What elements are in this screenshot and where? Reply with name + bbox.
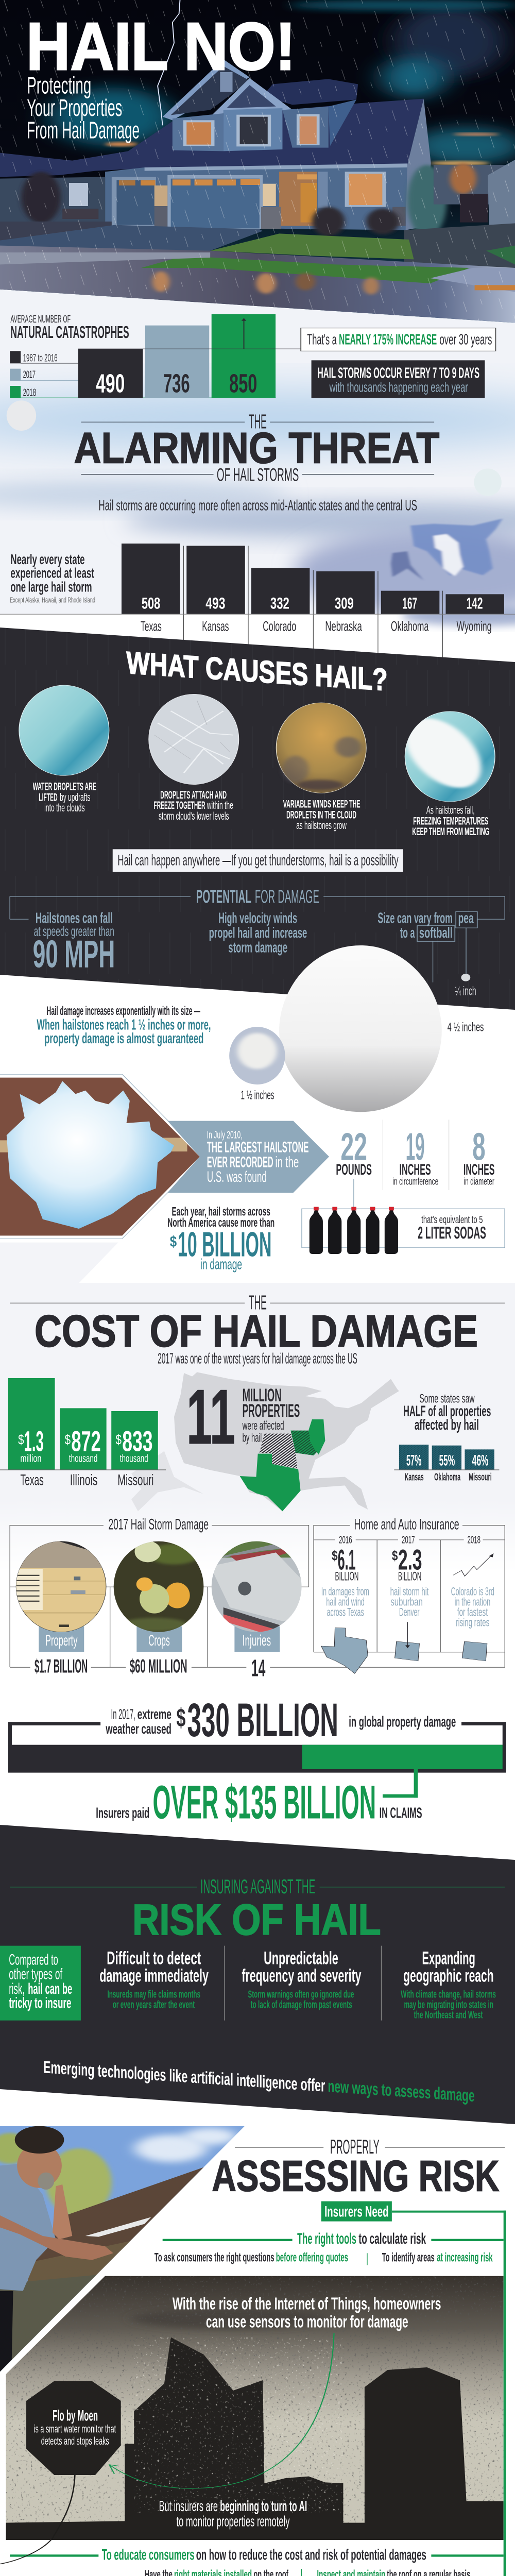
photo: injuries windshield: Injuries xyxy=(243,1632,271,1649)
panel: risk of hail content: hail can be xyxy=(28,1980,72,1997)
stat: 330 billion: $ xyxy=(176,1704,185,1733)
heading: the alarming threat xyxy=(7,400,502,514)
column: difficult to detect xyxy=(99,1948,209,2010)
bar chart: storms by state: 167 xyxy=(402,594,417,613)
heading: the alarming threat: OF HAIL STORMS xyxy=(217,465,299,485)
heading: risk of hail xyxy=(10,1875,505,1944)
legend: 2017 xyxy=(23,369,36,380)
photo: inspector on roof xyxy=(0,2126,250,2374)
stats: hailstone measurements xyxy=(336,1120,494,1209)
column: 2017: 2017 xyxy=(402,1534,415,1546)
chart: half of all properties xyxy=(394,1392,499,1483)
column: 2017 xyxy=(390,1534,428,1661)
step 1: water droplets: LIFTED xyxy=(39,791,58,804)
photo: crop damage xyxy=(114,1541,203,1677)
panel: hail storms by state: Nearly every state xyxy=(10,551,85,568)
panel: properly assessing risk text: beginning to turn to AI xyxy=(220,2498,307,2515)
arrow: curved green xyxy=(109,2333,334,2488)
callout: tricky to insure xyxy=(0,1946,81,2021)
panel: hail size comparison xyxy=(37,945,484,1112)
panel: hail storms by state: one large hail storm xyxy=(10,579,92,595)
panel: risk of hail content: Difficult to detect xyxy=(107,1948,201,1969)
panel: 2017 hail storm damage xyxy=(9,1515,309,1682)
stat: 11 million properties: by hail xyxy=(243,1431,262,1445)
frame xyxy=(9,1525,309,1668)
panel: hail formation steps xyxy=(19,685,496,838)
bar chart: storms by state: Nebraska xyxy=(325,618,362,634)
icon: hailstone core xyxy=(237,1033,277,1069)
panel: home and auto insurance: BILLION xyxy=(398,1569,421,1583)
panel: home and auto insurance: suburban xyxy=(390,1596,423,1608)
stat: ten billion: in damage xyxy=(200,1256,242,1273)
photo: largest hailstone xyxy=(0,1074,203,1239)
stat: 330 billion: In 2017, xyxy=(111,1706,135,1722)
text: high velocity winds xyxy=(209,910,307,956)
step 4: freezing temperatures xyxy=(405,711,495,835)
panel: properties affected xyxy=(0,1372,499,1511)
stat: 90 mph xyxy=(33,910,115,976)
panel: hail formation steps: DROPLETS ATTACH AND xyxy=(160,789,227,801)
text: insurers turn to AI: But insurers are xyxy=(159,2498,218,2515)
panel: home and auto insurance: hail and wind xyxy=(326,1596,365,1608)
text: damage increases xyxy=(37,1004,211,1047)
stat: 135 billion claims xyxy=(96,1775,422,1828)
text: internet of things xyxy=(173,2294,441,2331)
bar chart: storms by state: Oklahoma xyxy=(391,618,428,634)
text: size range xyxy=(377,910,477,982)
text: nearly every state xyxy=(10,551,95,604)
chart: half of all properties: Kansas xyxy=(405,1470,424,1483)
bar chart xyxy=(78,314,301,398)
text: size range: to a xyxy=(400,925,415,941)
panel: properties affected: PROPERTIES xyxy=(243,1401,300,1421)
panel: 2017 hail storm damage: $60 MILLION xyxy=(130,1655,187,1677)
callout: hail storm frequency xyxy=(312,360,485,398)
stat: ten billion: $ xyxy=(170,1233,177,1250)
bar chart: storms by state xyxy=(0,544,515,657)
panel: home and auto insurance: In damages from xyxy=(321,1585,369,1598)
callout: hail can happen anywhere xyxy=(113,849,403,872)
column: 2018: 2018 xyxy=(468,1534,480,1546)
panel: risk of hail content: or even years after the event xyxy=(113,1998,195,2010)
panel: hail storms by state: Except Alaska, Hawaii, and Rhode Island xyxy=(10,596,95,604)
heading: natural catastrophes: AVERAGE NUMBER OF xyxy=(10,313,71,325)
panel: risk of hail content: other types of xyxy=(9,1965,62,1982)
panel: cost section background xyxy=(0,1283,515,1571)
panel: hero photo of house in storm xyxy=(0,0,515,326)
legend xyxy=(10,351,276,398)
subtitle: Protecting xyxy=(27,72,91,98)
title: Hail No xyxy=(26,9,296,143)
heading: the cost of hail damage: THE xyxy=(249,1292,267,1314)
bar chart: cost by state: thousand xyxy=(69,1452,97,1464)
callout: 175% increase: That's a xyxy=(307,331,337,348)
column: 2016: 2016 xyxy=(339,1534,352,1546)
bar chart: storms by state: Texas xyxy=(141,618,162,634)
panel: risk of hail content: damage immediately xyxy=(99,1966,209,1986)
callout: tricky to insure: risk, xyxy=(9,1980,25,1997)
text: educate consumers: To educate consumers xyxy=(102,2546,195,2563)
callout: 175% increase xyxy=(301,328,495,351)
arrow banner: largest hailstone: U.S. was found xyxy=(207,1168,267,1185)
bar: property damage vs claims xyxy=(8,1722,506,1798)
bar chart: cost by state: $ xyxy=(115,1432,122,1447)
panel: risk of hail content: Compared to xyxy=(9,1951,58,1968)
panel: gray corner xyxy=(0,1243,118,1283)
panel: hail storms by state xyxy=(0,519,515,657)
bar chart: cost by state xyxy=(0,1378,166,1488)
icon: lightning bolt xyxy=(158,0,180,125)
arrow banner: largest hailstone: In July 2010, xyxy=(207,1128,243,1141)
heading: the cost of hail damage xyxy=(10,1292,505,1367)
stat: 330 billion: weather caused xyxy=(106,1721,171,1737)
bar chart: storms by state: 332 xyxy=(270,594,289,613)
column: 2016 xyxy=(321,1534,369,1673)
panel: properly assessing risk text: detects and stops leaks xyxy=(41,2435,109,2447)
panel: hail formation steps: WATER DROPLETS ARE xyxy=(33,780,96,793)
panel: potential for damage: storm damage xyxy=(228,939,287,956)
panel: home and auto insurance xyxy=(270,1515,505,1673)
panel: hail formation steps: as hailstones grow xyxy=(296,819,347,832)
text: insurers turn to AI xyxy=(159,2498,307,2530)
stat: 330 billion xyxy=(106,1693,456,1747)
panel: risk of hail content: Insureds may file claims months xyxy=(108,1988,200,2000)
step 3: variable winds xyxy=(276,703,366,832)
panel: 2017 hail storm damage: 2017 Hail Storm Damage xyxy=(108,1515,209,1533)
column: 2018 xyxy=(451,1534,494,1661)
panel: properties affected: 833 xyxy=(122,1426,153,1458)
panel: home and auto insurance: 2.3 xyxy=(398,1544,422,1576)
label: insurers need xyxy=(321,2201,392,2222)
frame xyxy=(270,1525,505,1668)
bar chart: cost by state: Illinois xyxy=(70,1471,97,1488)
panel: properly assessing risk text: is a smart water monitor that xyxy=(34,2423,116,2435)
heading: the alarming threat: THE xyxy=(249,411,267,433)
bar chart: 736 xyxy=(163,369,190,398)
panel: largest hailstone record: North America cause more than xyxy=(167,1215,274,1229)
text: right tools: The right tools xyxy=(297,2230,356,2247)
stats: hailstone measurements: 19 xyxy=(406,1125,425,1168)
photo: injuries windshield xyxy=(210,1540,305,1682)
heading: potential for damage xyxy=(9,886,505,920)
text: emerging technologies xyxy=(43,2057,475,2105)
panel: home and auto insurance: hail storm hit xyxy=(390,1585,428,1598)
panel: properties affected: Missouri xyxy=(117,1471,153,1488)
arrow banner: largest hailstone xyxy=(167,1121,329,1193)
panel: hail formation steps: within the xyxy=(207,799,233,811)
panel: potential for damage xyxy=(9,849,505,998)
bar chart: cost by state: $ xyxy=(18,1432,24,1447)
stats: hailstone measurements: 22 xyxy=(340,1125,367,1168)
connector: green frame xyxy=(10,2211,506,2576)
stat: 11 million properties: 11 xyxy=(186,1374,235,1460)
photo: crop damage: Crops xyxy=(148,1632,170,1649)
heading: potential for damage: FOR DAMAGE xyxy=(255,886,319,907)
title: Hail No: From Hail Damage xyxy=(27,116,140,143)
callout: 2 liter sodas xyxy=(302,1207,505,1254)
panel: global damage and claims xyxy=(8,1693,506,1828)
bar chart: cost by state: 1.3 xyxy=(24,1426,44,1458)
arrow banner: largest hailstone: in the xyxy=(275,1154,299,1171)
panel: home and auto insurance: across Texas xyxy=(327,1606,364,1619)
step 2: droplets freeze xyxy=(149,694,239,822)
bar chart: storms by state: 309 xyxy=(335,594,354,613)
panel: hail size comparison: 1 ½ inches xyxy=(241,1088,274,1102)
heading: natural catastrophes xyxy=(10,313,129,342)
bar chart: 490 xyxy=(96,369,125,398)
panel: home and auto insurance: 6.1 xyxy=(338,1544,356,1576)
bar chart: 850 xyxy=(229,369,257,398)
panel: properties affected: were affected xyxy=(242,1418,284,1432)
panel: natural catastrophes chart xyxy=(10,313,495,398)
panel: 2017 hail storm damage: $1.7 BILLION xyxy=(35,1655,88,1677)
legend: 2018 xyxy=(23,387,36,398)
photo: property damage: Property xyxy=(45,1632,78,1649)
bar chart: storms by state: Kansas xyxy=(202,618,229,634)
map: United States xyxy=(131,1372,399,1511)
panel: potential for damage: Hailstones can fall xyxy=(36,910,113,926)
stat: 330 billion: extreme xyxy=(138,1706,171,1722)
stats: hailstone measurements: POUNDS xyxy=(336,1161,372,1178)
bar chart: cost by state: thousand xyxy=(120,1452,148,1464)
step 1: water droplets xyxy=(19,685,109,814)
heading: potential for damage: POTENTIAL xyxy=(196,886,251,907)
bar chart: cost by state: million xyxy=(21,1452,41,1464)
panel: hail formation steps: into the clouds xyxy=(44,802,85,814)
stats: hailstone measurements: INCHES xyxy=(400,1161,431,1178)
icon: 1.5 inch hailstone xyxy=(229,1027,285,1084)
bar chart: cost by state: Texas xyxy=(21,1471,44,1488)
bar chart: cost by state: 872 xyxy=(71,1426,101,1458)
panel: properly assessing risk text: Flo by Moen xyxy=(53,2406,98,2424)
photo: injuries windshield: 14 xyxy=(251,1655,265,1682)
panel: home and auto insurance: Denver xyxy=(399,1606,419,1619)
panel: potential for damage: pea xyxy=(458,910,474,926)
photo: property damage xyxy=(15,1541,106,1674)
column: 2017: $ xyxy=(392,1548,398,1563)
panel: what causes hail dark section xyxy=(0,628,515,1010)
panel: home and auto insurance: BILLION xyxy=(335,1569,358,1583)
column: unpredictable xyxy=(242,1948,362,2010)
panel: largest hailstone record: EVER RECORDED xyxy=(207,1154,273,1171)
subtitle xyxy=(27,72,140,143)
panel: properties affected: MILLION xyxy=(243,1385,282,1405)
chart: half of all properties: 55% xyxy=(439,1451,455,1469)
stat: 135 billion claims: Insurers paid xyxy=(96,1805,149,1821)
column: 2016: $ xyxy=(332,1548,338,1563)
panel: properly assessing risk text xyxy=(0,2136,506,2576)
panel: hail formation steps: storm cloud's lower levels xyxy=(159,810,229,822)
photo: rain on window with silhouettes xyxy=(0,2276,515,2541)
bar chart: cost by state: $ xyxy=(65,1432,71,1447)
bar chart: storms by state: 508 xyxy=(142,594,160,613)
panel: potential for damage: at speeds greater than xyxy=(34,923,114,939)
panel: largest hailstone record xyxy=(0,1074,505,1283)
panel: hail formation steps: by updrafts xyxy=(60,791,90,804)
callout: Flo by Moen xyxy=(0,2381,121,2564)
panel: largest hailstone record: Each year, hail storms across xyxy=(172,1205,270,1218)
text: educate consumers xyxy=(102,2546,470,2576)
panel: potential for damage: High velocity winds xyxy=(218,910,297,926)
stats: hailstone measurements: 8 xyxy=(472,1125,486,1168)
panel: risk of hail content: Unpredictable xyxy=(264,1948,338,1969)
panel: risk of hail dark section xyxy=(0,1825,515,2124)
panel: potential for damage: 90 MPH xyxy=(33,933,115,976)
bar chart: storms by state: 493 xyxy=(205,594,226,613)
text: right tools xyxy=(154,2230,493,2265)
icon: softball hailstone xyxy=(279,945,442,1112)
legend: 1987 to 2016 xyxy=(23,352,58,364)
panel: hail formation steps: FREEZE TOGETHER xyxy=(153,799,205,811)
panel: light sky background xyxy=(0,278,515,680)
panel: risk of hail content xyxy=(0,1875,505,2105)
icon: US map in clouds xyxy=(391,519,503,581)
panel: natural catastrophes chart: NATURAL CATASTROPHES xyxy=(10,323,129,342)
bar chart: storms by state: Colorado xyxy=(263,618,296,634)
column: expanding reach xyxy=(401,1948,496,2021)
stat: ten billion xyxy=(167,1205,274,1273)
panel: hail storms by state: experienced at least xyxy=(10,565,94,581)
panel: risk of hail content: tricky to insure xyxy=(9,1994,71,2011)
title: Hail No: Your Properties xyxy=(27,94,122,121)
chart: half of all properties: 57% xyxy=(406,1451,421,1469)
icon: pea hailstone xyxy=(461,974,470,981)
